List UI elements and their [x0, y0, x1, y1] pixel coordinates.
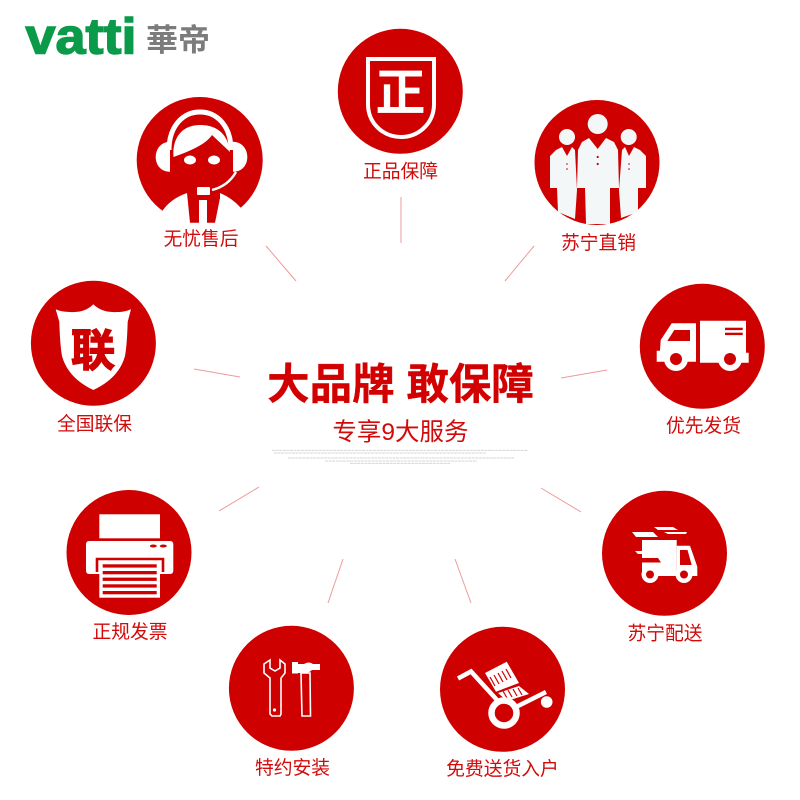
panel: Suning delivery: 苏宁配送	[627, 622, 703, 644]
title: 大品牌 敢保障	[267, 362, 534, 409]
panel: official invoice	[66, 490, 192, 642]
icon: shield with 正	[368, 59, 434, 137]
panel: Suning delivery	[602, 491, 727, 644]
panel: priority shipping: 优先发货	[666, 415, 741, 436]
spokes radiating from the centre	[194, 197, 607, 603]
panel: nationwide warranty	[31, 281, 156, 434]
panel: free home delivery	[440, 627, 565, 779]
icon: printer	[86, 514, 173, 598]
panel: Suning direct sales: 苏宁直销	[561, 232, 636, 253]
panel: genuine products	[338, 29, 463, 182]
panel: worry-free after-sales: 无忧售后	[163, 228, 239, 249]
panel: worry-free after-sales	[137, 97, 263, 249]
panel: nationwide warranty: 全国联保	[57, 413, 132, 434]
panel: Suning direct sales	[534, 100, 660, 253]
icon: shield with 联	[56, 304, 131, 390]
fine print lines	[272, 450, 528, 463]
icon: speeding delivery van	[632, 527, 697, 583]
icon: lorry	[657, 321, 749, 371]
icon: customer service agent with headset	[145, 112, 255, 230]
icon: shield with 正: 正	[376, 65, 426, 121]
panel: special installation	[229, 626, 354, 778]
icon: three business people	[550, 114, 646, 224]
logo: vatti 華帝: 華帝	[146, 23, 210, 58]
panel: official invoice: 正规发票	[92, 621, 168, 642]
panel: special installation: 特约安装	[255, 757, 330, 778]
logo: vatti 華帝: vatti	[26, 8, 136, 64]
subtitle: 专享9大服务	[332, 418, 469, 446]
logo: vatti 華帝	[26, 8, 210, 64]
icon: shield with 联: 联	[71, 326, 115, 376]
panel: genuine products: 正品保障	[363, 160, 438, 182]
panel: priority shipping	[640, 284, 765, 436]
icon: hand truck with parcels	[458, 662, 552, 726]
icon: wrench and hammer	[264, 660, 320, 716]
panel: free home delivery: 免费送货入户	[446, 758, 559, 779]
